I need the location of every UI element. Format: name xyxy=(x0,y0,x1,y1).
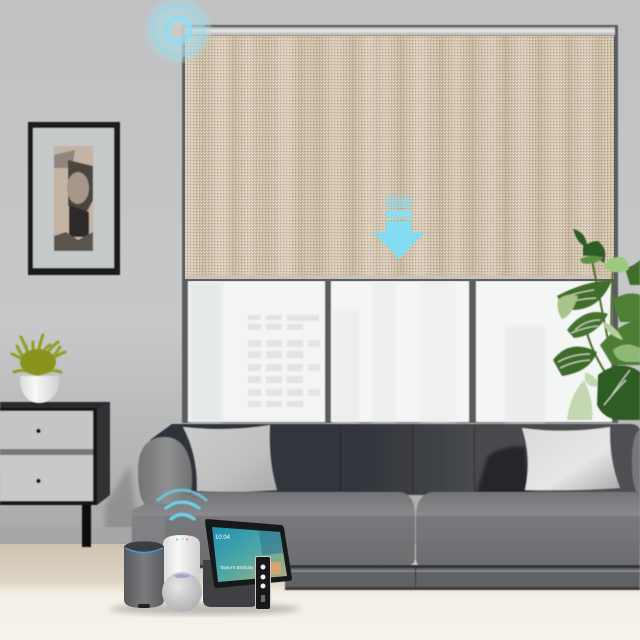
floor xyxy=(0,544,640,640)
fabric vertical bands xyxy=(186,36,602,277)
right seat cushion xyxy=(416,492,640,565)
leaf slits xyxy=(558,290,630,405)
left pillow xyxy=(183,425,277,492)
smart home devices xyxy=(110,490,300,615)
lower drawer xyxy=(0,455,93,501)
potted plant on cabinet xyxy=(12,335,65,403)
screen xyxy=(212,527,287,582)
remote control xyxy=(255,556,271,610)
device ground shadow xyxy=(110,603,300,615)
wifi signal icon xyxy=(158,490,206,519)
window xyxy=(182,25,618,423)
window frame xyxy=(182,25,618,423)
right arm xyxy=(632,430,640,496)
screen clock: 10:04 xyxy=(215,535,231,541)
window pane right xyxy=(476,281,612,422)
baseboard xyxy=(0,527,135,544)
down arrow icon xyxy=(373,193,425,259)
cabinet xyxy=(0,402,110,547)
photo thumbnail xyxy=(270,562,281,574)
blind bottom bar xyxy=(185,276,614,279)
framed picture xyxy=(28,122,120,275)
dark monstera leaves xyxy=(553,229,640,420)
plant stems xyxy=(585,250,618,420)
google home speaker xyxy=(163,535,200,582)
sofa xyxy=(132,424,640,590)
cabinet leg xyxy=(82,505,91,547)
grass leaves xyxy=(12,335,65,375)
back cushion shading xyxy=(340,425,530,494)
wall shadow right of cabinet xyxy=(105,465,140,545)
white pot xyxy=(20,376,59,403)
echo show base xyxy=(203,560,258,607)
signal ripple icon xyxy=(144,0,212,64)
blind headrail xyxy=(185,27,615,36)
upper drawer xyxy=(0,411,93,449)
window pane left xyxy=(188,281,325,422)
echo show tablet xyxy=(205,519,292,588)
left arm xyxy=(138,437,192,507)
sofa back xyxy=(150,424,640,495)
left seat cushion xyxy=(132,492,415,565)
window pane middle xyxy=(331,281,469,422)
drawer knobs xyxy=(36,429,41,483)
screen headline: Taylor's Birthday xyxy=(220,565,254,570)
roller blind fabric xyxy=(185,36,614,281)
pale translucent leaves xyxy=(567,372,600,420)
right pillow xyxy=(522,427,620,490)
sofa base xyxy=(132,565,640,590)
monstera plant xyxy=(553,229,640,420)
homepod mini speaker xyxy=(162,572,202,612)
light leaves xyxy=(558,257,640,362)
photo xyxy=(54,146,93,251)
amazon echo speaker xyxy=(124,541,164,608)
